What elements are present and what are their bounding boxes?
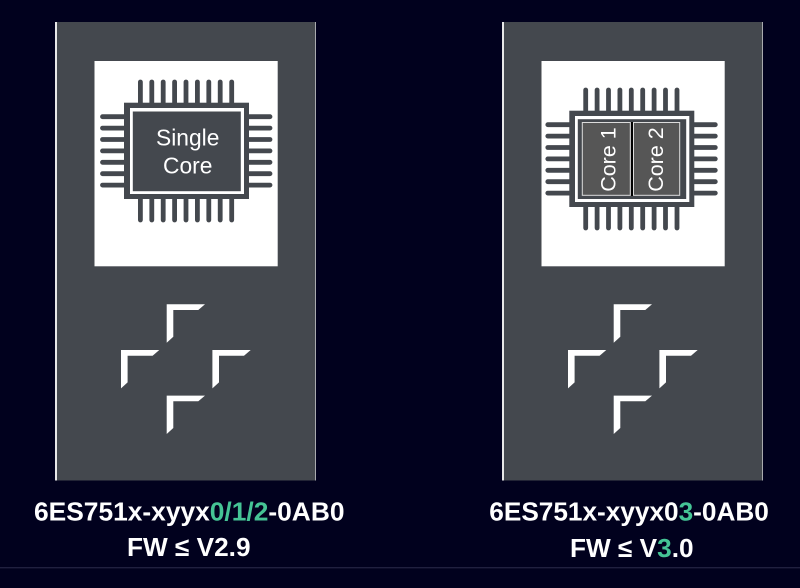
chip card: dual core (542, 61, 725, 266)
core 1 block (582, 122, 630, 195)
caption: dual core part number and firmware: FW ≤ V3.0 (570, 533, 694, 563)
caption: dual core part number and firmware: 6ES751x-xyyx03-0AB0 (489, 497, 769, 527)
caption: dual core part number and firmware (489, 497, 769, 563)
caption: single core part number and firmware (34, 496, 344, 562)
icon: four corner marks (121, 304, 251, 434)
caption: single core part number and firmware: 6ES751x-xyyx0/1/2-0AB0 (34, 496, 344, 526)
core 2 block (634, 122, 680, 195)
core 1 block: Core 1 (596, 127, 620, 192)
core 2 block: Core 2 (644, 127, 668, 192)
panel: dual core module (502, 22, 763, 480)
icon: four corner marks (568, 304, 698, 434)
caption: single core part number and firmware: FW ≤ V2.9 (127, 532, 251, 562)
panel: single core module (55, 22, 316, 480)
chip card: single core (94, 61, 278, 266)
chip card: single core: Core (163, 152, 212, 178)
chip label: single core: Single (156, 125, 219, 151)
